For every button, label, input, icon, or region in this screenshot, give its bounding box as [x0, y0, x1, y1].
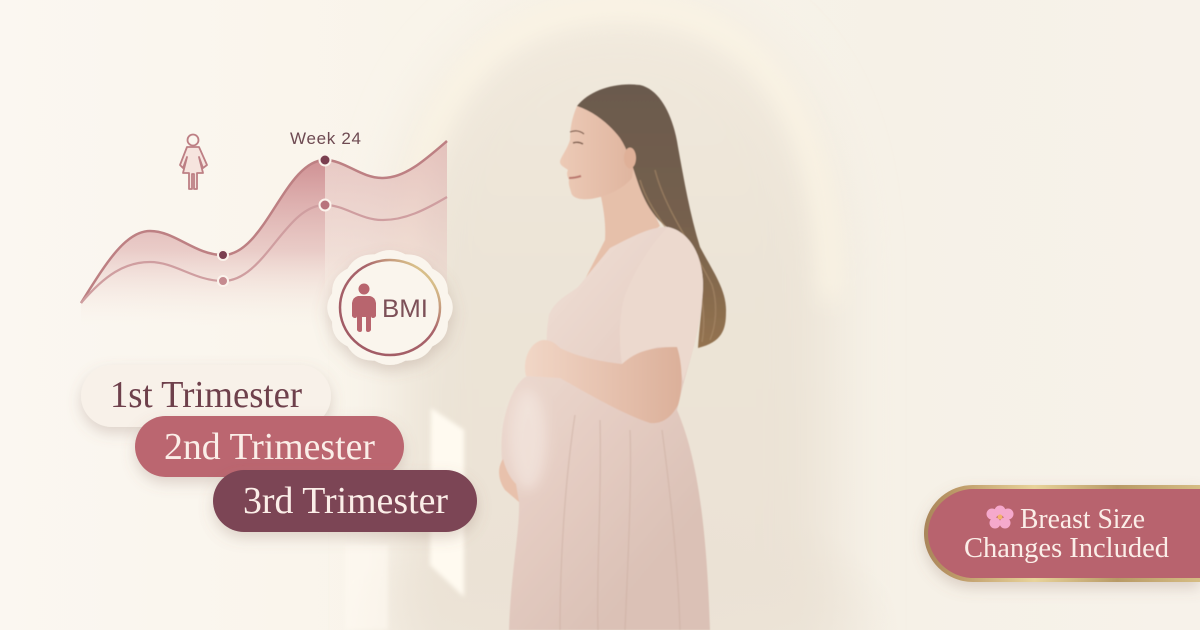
badge ring — [340, 260, 440, 355]
callout: breast size — [924, 485, 1200, 582]
marker dots — [218, 154, 330, 286]
pill: 2nd trimester — [135, 416, 404, 477]
dress folds — [560, 415, 680, 630]
BMI label: BMI — [382, 295, 428, 323]
ear — [624, 148, 636, 168]
woman in profile — [499, 84, 726, 630]
pill: 2nd trimester: 2nd Trimester — [164, 426, 375, 468]
chart area: right of week 24 — [325, 141, 447, 335]
dress — [501, 227, 710, 630]
sleeve — [620, 227, 703, 382]
pill: 3rd trimester — [213, 470, 477, 532]
pill: 1st trimester: 1st Trimester — [110, 374, 302, 416]
icon: cherry blossom — [986, 506, 1014, 528]
face — [560, 106, 636, 199]
belly highlight — [510, 390, 546, 490]
hair — [577, 84, 726, 348]
pill: 1st trimester — [81, 365, 331, 427]
BMI badge — [327, 250, 453, 365]
week label: Week 24 — [290, 129, 361, 148]
callout text: Breast Size — [1020, 504, 1145, 535]
icon: person — [352, 284, 376, 332]
chart area: left of week 24 — [81, 160, 325, 335]
pill: 3rd trimester: 3rd Trimester — [243, 480, 448, 522]
lower hand — [499, 459, 519, 502]
window light patches — [345, 408, 464, 630]
upper line — [81, 141, 447, 303]
hair highlights — [640, 170, 716, 342]
badge scalloped plate — [327, 250, 453, 365]
arm — [525, 340, 682, 423]
area chart — [81, 129, 447, 335]
neck — [582, 165, 660, 285]
eye brow and lips — [569, 131, 584, 178]
callout: breast size: Changes Included — [964, 533, 1169, 564]
lower line — [81, 197, 447, 303]
icon: female figure — [180, 134, 207, 189]
